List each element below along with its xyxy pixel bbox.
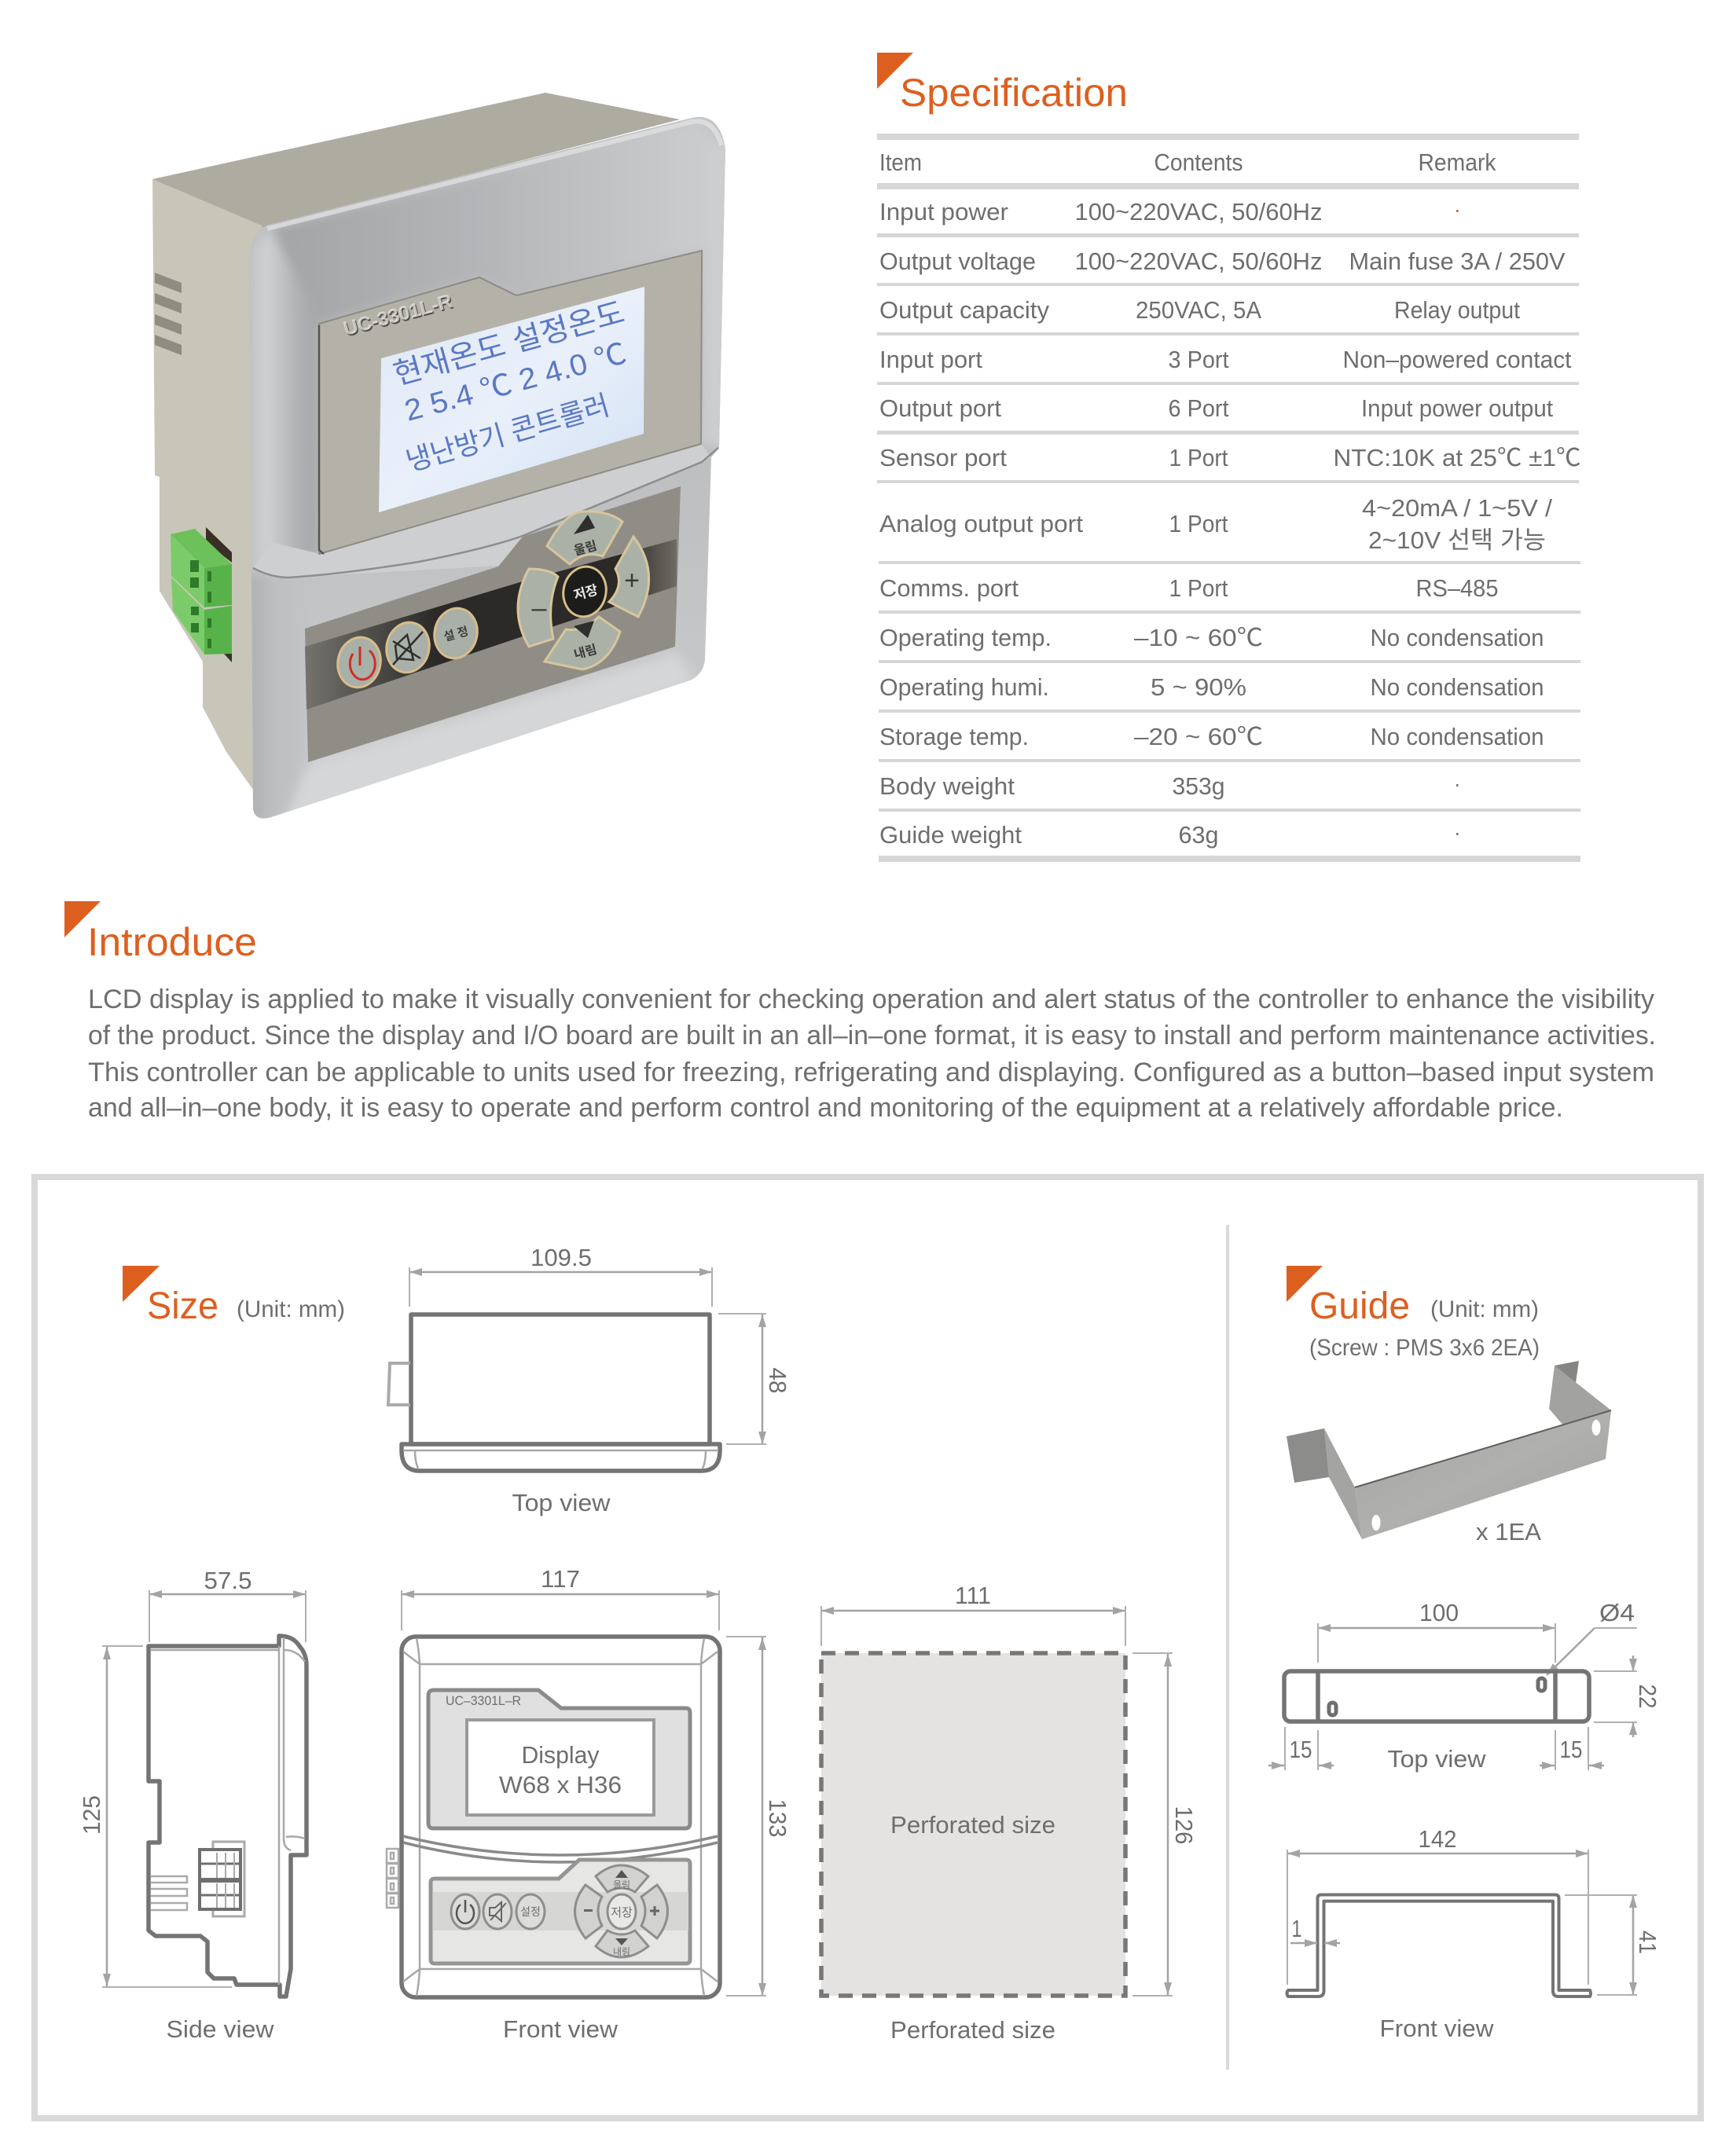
icon: orange triangle <box>64 901 101 937</box>
table contents column: 1 Port <box>1169 510 1228 537</box>
dimension 15 right: 15 <box>1559 1736 1583 1763</box>
bezel soft shading <box>244 121 731 825</box>
bent profile <box>1287 1895 1591 1996</box>
hole dimension <box>1547 1599 1637 1675</box>
table rules <box>877 134 1580 862</box>
bezel inner lines <box>403 1638 718 1996</box>
table remark column: 4~20mA / 1~5V / <box>1362 494 1552 522</box>
table item column: Guide weight <box>879 821 1022 849</box>
up key glyph: 울림 <box>572 538 599 559</box>
width dimension 111: 111 <box>955 1582 991 1609</box>
width dimension 117 <box>402 1565 719 1630</box>
table item column: Item <box>879 148 922 176</box>
display label <box>499 1741 622 1798</box>
dimension 100 <box>1318 1599 1555 1663</box>
height dimension 133 <box>726 1637 791 1996</box>
table contents column: 100~220VAC, 50/60Hz <box>1075 198 1322 226</box>
terminal stub <box>388 1363 410 1405</box>
table contents column: 3 Port <box>1168 346 1229 373</box>
plus key glyph: + <box>624 566 640 596</box>
drawing: side view <box>78 1567 307 2043</box>
drawing: guide top view <box>1268 1599 1661 1773</box>
silver bezel <box>249 117 725 819</box>
front bezel <box>402 1444 720 1471</box>
table contents column: –10 ~ 60℃ <box>1134 624 1263 651</box>
table item column: Operating humi. <box>879 673 1049 701</box>
power button <box>451 1894 479 1929</box>
model label: UC-3301L-R <box>343 292 456 342</box>
LCD line 3: 냉난방기 콘트롤러 <box>402 389 613 478</box>
table contents column: 5 ~ 90% <box>1151 673 1246 701</box>
cutout area <box>821 1653 1125 1996</box>
side outline <box>149 1636 307 1996</box>
quantity note: x 1EA <box>1476 1518 1541 1546</box>
introduction paragraph <box>88 984 1656 1123</box>
display panel <box>428 1690 690 1828</box>
table item column: Sensor port <box>879 444 1007 471</box>
table item column: Analog output port <box>879 510 1083 537</box>
dimension 100: 100 <box>1419 1599 1459 1626</box>
direction keys <box>575 1865 668 1957</box>
introduction paragraph: LCD display is applied to make it visually convenient for checking operation and alert status of the controller to enhance the visibility <box>88 984 1654 1014</box>
table remark column: 2~10V 선택 가능 <box>1368 526 1546 554</box>
panel: guide <box>1268 1266 1661 2042</box>
table contents column: –20 ~ 60℃ <box>1134 723 1263 750</box>
green terminal block <box>171 527 232 662</box>
direction keys <box>518 512 649 669</box>
down key glyph <box>572 621 599 662</box>
height dimension 133: 133 <box>764 1799 791 1837</box>
panel: size <box>78 1244 1198 2044</box>
table remark column: No condensation <box>1371 723 1544 750</box>
dimension 22: 22 <box>1634 1685 1661 1708</box>
table contents column: 6 Port <box>1168 394 1229 422</box>
height dimension 126 <box>1132 1653 1198 1996</box>
product photo: controller <box>152 93 731 825</box>
table item column <box>879 148 1083 849</box>
panel: dimensions frame <box>35 1177 1701 2118</box>
dimension 1 <box>1290 1915 1340 1943</box>
introduction paragraph: and all–in–one body, it is easy to operate and perform control and monitoring of the equipment at a relatively affordable price. <box>88 1093 1563 1123</box>
vent pins <box>151 1876 187 1910</box>
terminal connector <box>200 1842 244 1916</box>
heading: Guide: Guide <box>1309 1285 1410 1327</box>
housing top face <box>152 93 680 228</box>
save key <box>608 1894 636 1929</box>
table item column: Output port <box>879 394 1001 422</box>
table contents column: 250VAC, 5A <box>1136 296 1261 324</box>
screw note: (Screw : PMS 3x6 2EA) <box>1309 1335 1540 1361</box>
bezel seam <box>253 448 718 578</box>
table remark column: Remark <box>1418 148 1496 176</box>
table contents column <box>1075 148 1322 849</box>
table contents column: 353g <box>1173 772 1224 800</box>
mute button <box>483 1894 512 1929</box>
key labels: 내림 <box>613 1946 630 1957</box>
guide plate <box>1284 1671 1589 1722</box>
display window <box>467 1720 654 1815</box>
unit body <box>411 1314 710 1444</box>
set button <box>516 1894 545 1929</box>
table contents column: Contents <box>1154 148 1243 176</box>
table item column: Operating temp. <box>879 624 1052 651</box>
caption: perforated size: Perforated size <box>890 2016 1055 2044</box>
unit note: (Unit: mm) <box>237 1296 345 1322</box>
table item column: Body weight <box>879 772 1015 800</box>
set button: 설정 <box>520 1905 541 1918</box>
table contents column: 100~220VAC, 50/60Hz <box>1075 248 1322 275</box>
drawing: perforated size <box>821 1582 1198 2044</box>
save key: 저장 <box>611 1906 633 1920</box>
LCD line 2: 2 5.4 ℃ 2 4.0 ℃ <box>401 337 630 428</box>
LCD line 1: 현재온도 설정온도 <box>390 296 628 392</box>
height dimension 125: 125 <box>78 1795 105 1835</box>
set button: 설 정 <box>442 625 470 644</box>
depth dimension 48 <box>718 1314 791 1444</box>
width dimension 111 <box>821 1582 1125 1646</box>
caption: front view: Front view <box>503 2015 619 2043</box>
panel: introduce <box>64 901 1656 1123</box>
save key <box>559 563 611 621</box>
key labels <box>584 1870 659 1957</box>
table remark column: NTC:10K at 25℃ ±1℃ <box>1333 444 1581 471</box>
dimension 142: 142 <box>1418 1825 1457 1853</box>
table item column: Output capacity <box>879 296 1049 324</box>
heading: Introduce: Introduce <box>87 920 257 964</box>
depth dimension 48: 48 <box>764 1367 791 1394</box>
display label: Display <box>522 1741 600 1769</box>
down key glyph: 내림 <box>572 642 599 662</box>
cutout label: Perforated size <box>890 1811 1055 1839</box>
drawing: front view <box>387 1565 791 2043</box>
mute button <box>382 618 434 676</box>
table contents column: 63g <box>1179 821 1218 849</box>
table remark column: Non–powered contact <box>1342 346 1572 373</box>
dimension 1: 1 <box>1292 1915 1301 1942</box>
LCD screen <box>379 287 644 512</box>
dimension 41 <box>1565 1895 1661 1995</box>
caption: top view: Top view <box>512 1489 611 1516</box>
width dimension 117: 117 <box>541 1565 580 1593</box>
icon: orange triangle <box>123 1266 160 1302</box>
heading: Size: Size <box>147 1285 218 1327</box>
table remark column: No condensation <box>1371 673 1544 701</box>
model label: UC-3301L-R <box>341 290 454 340</box>
save key: 저장 <box>572 582 600 603</box>
table item column: Input port <box>879 346 982 373</box>
width dimension 57.5: 57.5 <box>204 1567 251 1594</box>
table remark column: Main fuse 3A / 250V <box>1349 248 1566 275</box>
table remark column: Relay output <box>1394 296 1520 324</box>
dimension 142 <box>1287 1825 1588 1985</box>
control panel <box>431 1860 690 1964</box>
caption: guide top view: Top view <box>1388 1745 1486 1773</box>
dimension 22 <box>1594 1656 1661 1737</box>
power button <box>333 633 385 691</box>
set button <box>430 604 482 662</box>
display panel <box>319 251 702 554</box>
bar under display <box>253 444 711 578</box>
photo: metal bracket <box>1287 1361 1611 1539</box>
width dimension 57.5 <box>149 1567 306 1642</box>
table item column: Storage temp. <box>879 723 1029 750</box>
table remark column <box>1333 148 1581 835</box>
table contents column: 1 Port <box>1169 444 1228 471</box>
hole dimension: Ø4 <box>1599 1599 1635 1626</box>
introduction paragraph: of the product. Since the display and I/O board are built in an all–in–one format, it is easy to install and perform maintenance activities. <box>88 1021 1656 1050</box>
height dimension 126: 126 <box>1170 1806 1198 1845</box>
front outline <box>402 1637 720 1997</box>
introduction paragraph: This controller can be applicable to units used for freezing, refrigerating and displaying. Configured as a button–based input system <box>88 1058 1654 1087</box>
key labels: 올림 <box>613 1879 630 1890</box>
control panel <box>305 486 681 762</box>
table remark column: Input power output <box>1361 394 1553 422</box>
divider between size and guide <box>1226 1225 1229 2070</box>
height dimension 125 <box>78 1646 232 1987</box>
display label: W68 x H36 <box>499 1771 622 1798</box>
width dimension 109.5 <box>409 1244 712 1307</box>
table item column: Input power <box>879 198 1008 226</box>
panel: specification <box>877 53 1581 862</box>
table item column: Output voltage <box>879 248 1036 275</box>
drawing: top view <box>388 1244 791 1516</box>
terminal block <box>387 1849 398 1908</box>
minus key glyph: – <box>532 593 547 623</box>
dimension 41: 41 <box>1634 1930 1661 1954</box>
width dimension 109.5: 109.5 <box>530 1244 592 1271</box>
housing side face <box>152 179 262 790</box>
up key glyph <box>572 515 599 559</box>
icon: orange triangle <box>1287 1266 1323 1302</box>
dimension 15 left <box>1268 1727 1334 1770</box>
drawing: guide front view <box>1287 1825 1661 2042</box>
caption: guide front view: Front view <box>1380 2015 1494 2042</box>
table remark column: No condensation <box>1371 624 1544 651</box>
mounting holes <box>1329 1678 1545 1715</box>
bezel inner lines <box>151 1637 305 1985</box>
side vents <box>155 273 182 355</box>
unit note: (Unit: mm) <box>1430 1296 1539 1322</box>
table item column: Comms. port <box>879 574 1019 602</box>
dimension 15 left: 15 <box>1289 1736 1312 1763</box>
icon: orange triangle <box>877 53 913 89</box>
table contents column: 1 Port <box>1169 574 1228 602</box>
heading: Specification: Specification <box>900 71 1128 115</box>
model text: UC–3301L–R <box>446 1693 521 1708</box>
seam <box>403 1836 718 1862</box>
dimension 15 right <box>1540 1727 1604 1770</box>
caption: side view: Side view <box>167 2015 274 2043</box>
table remark column: RS–485 <box>1416 574 1498 602</box>
